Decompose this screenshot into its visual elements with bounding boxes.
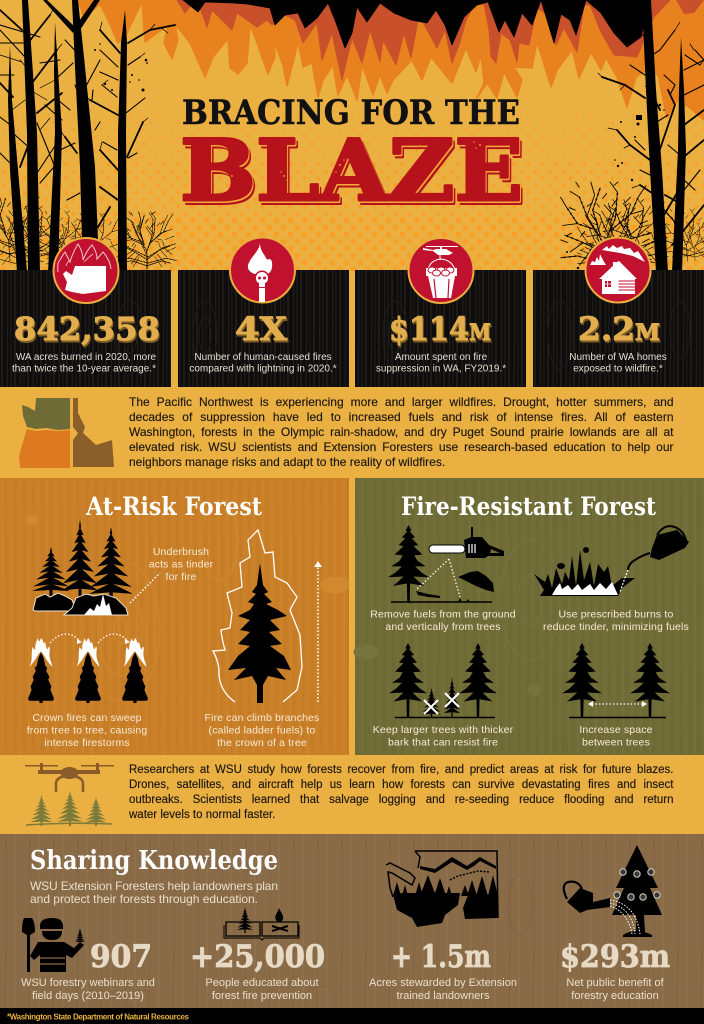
icon: Washington state with forest and river bbox=[386, 851, 498, 927]
label: prescribed burns: reduce tinder, minimizing fuels bbox=[543, 621, 689, 633]
illustration: keep larger trees bbox=[389, 643, 497, 718]
heading: At-Risk Forest bbox=[85, 492, 262, 521]
arrow: underbrush pointer bbox=[130, 573, 160, 603]
label: ladder fuels: (called ladder fuels) to bbox=[209, 724, 315, 736]
text block: research: outbreaks. Scientists learned that salvage logging and re-seeding reduce flooding and return bbox=[129, 794, 674, 806]
label: underbrush: for fire bbox=[166, 571, 196, 583]
label: remove fuels bbox=[370, 608, 516, 633]
caption bbox=[566, 977, 665, 1002]
label: crown fires: from tree to tree, causing bbox=[27, 724, 147, 736]
panel: Fire-Resistant Forest bbox=[354, 478, 704, 755]
arrow: climb upward bbox=[314, 561, 322, 702]
icon: Washington on fire bbox=[54, 238, 118, 303]
label: larger trees: bark that can resist fire bbox=[388, 736, 498, 748]
flames bbox=[78, 0, 704, 120]
dead trees left bbox=[0, 0, 177, 272]
caption: People educated about bbox=[205, 977, 319, 989]
stat panel: homes exposed: 2.2M bbox=[579, 312, 661, 350]
label: prescribed burns bbox=[543, 608, 689, 633]
stat: 907 bbox=[21, 939, 155, 1002]
stat panel: acres burned: WA acres burned in 2020, more bbox=[16, 352, 157, 363]
footer: *Washington State Department of Natural Resources bbox=[7, 1012, 190, 1022]
illustration: increase spacing bbox=[562, 643, 670, 718]
caption bbox=[205, 977, 319, 1002]
illustration: drip torch prescribed burn bbox=[534, 526, 689, 596]
caption: trained landowners bbox=[397, 990, 490, 1002]
label: prescribed burns: Use prescribed burns to bbox=[559, 608, 673, 620]
band: Pacific Northwest intro bbox=[0, 387, 704, 478]
label: spacing: between trees bbox=[582, 736, 650, 748]
stat panel: homes exposed: 2.2M bbox=[578, 310, 660, 348]
footer bbox=[0, 1008, 704, 1024]
caption bbox=[369, 977, 517, 1002]
icon: match with skull bbox=[230, 238, 295, 302]
icon: helicopter and bucket of money bbox=[408, 238, 474, 303]
label: crown fires: intense firestorms bbox=[44, 737, 130, 749]
text block: Pacific Northwest: decades of suppression have led to increased fuels and risk of intense fires. All of eastern bbox=[129, 410, 674, 424]
text block: Pacific Northwest: Washington, forests in the Olympic rain-shadow, and dry Puget Sound prairie lowlands are all at bbox=[129, 425, 674, 439]
text block: Pacific Northwest bbox=[129, 395, 674, 469]
label: larger trees: Keep larger trees with thicker bbox=[373, 724, 514, 736]
illustration: chainsaw removing fuels bbox=[388, 525, 504, 603]
title: Blaze: BLAZE bbox=[180, 121, 523, 220]
illustration: three firs with burning underbrush bbox=[32, 520, 133, 615]
label: crown fires bbox=[27, 712, 147, 749]
label: remove fuels: Remove fuels from the ground bbox=[370, 608, 516, 620]
label: ladder fuels bbox=[205, 712, 319, 749]
stat: 293m: $293m bbox=[560, 939, 670, 975]
stat panel: homes exposed: Number of WA homes bbox=[569, 352, 667, 363]
label: ladder fuels: Fire can climb branches bbox=[205, 712, 319, 724]
stat panel: acres burned: than twice the 10-year average.* bbox=[12, 364, 156, 374]
background: sky bbox=[0, 0, 704, 270]
label: underbrush bbox=[149, 546, 214, 583]
stat panel: suppression spending: $114M bbox=[390, 312, 492, 350]
stat: 293m bbox=[560, 939, 670, 1002]
title: Blaze: BLAZE bbox=[181, 122, 524, 222]
icon: watering can and money tree bbox=[564, 845, 662, 937]
title: Bracing for the: BRACING FOR THE bbox=[182, 93, 520, 133]
stat panel: homes exposed bbox=[533, 270, 704, 387]
label: underbrush: acts as tinder bbox=[149, 558, 214, 570]
stat: 1.5m: + 1.5m bbox=[391, 939, 491, 975]
caption: WSU forestry webinars and bbox=[21, 977, 155, 989]
title: Blaze: BLAZE bbox=[182, 124, 526, 224]
text block: research: Drones, satellites, and aircraft help us learn how forests can survive devastating fires and insect bbox=[129, 779, 674, 791]
stat panel: human-caused fires: 4X bbox=[235, 310, 287, 348]
stat: 25,000: +25,000 bbox=[190, 939, 325, 975]
stat: 25,000 bbox=[190, 939, 325, 1002]
icon: book with tree and campfire bbox=[224, 907, 299, 940]
label: ladder fuels: the crown of a tree bbox=[217, 737, 307, 749]
heading: Fire-Resistant Forest bbox=[401, 492, 656, 521]
stat panel: homes exposed: exposed to wildfire.* bbox=[573, 364, 663, 374]
label: spacing bbox=[579, 724, 653, 748]
stat panel: suppression spending bbox=[355, 270, 526, 387]
panel: At-Risk Forest bbox=[0, 478, 349, 755]
panel: Sharing Knowledge bbox=[0, 834, 704, 1014]
intro text bbox=[30, 879, 278, 906]
label: underbrush: Underbrush bbox=[153, 546, 209, 558]
map: WA, OR, ID bbox=[19, 398, 114, 468]
illustration: ladder fuel tree in flame outline bbox=[213, 530, 302, 703]
stat panel: suppression spending: $114M bbox=[389, 310, 491, 348]
caption: Net public benefit of bbox=[566, 977, 665, 989]
dead trees right bbox=[560, 0, 704, 273]
stat: 1.5m bbox=[369, 939, 517, 1002]
halftone dots bbox=[0, 112, 704, 272]
stat panel: human-caused fires: Number of human-caused fires bbox=[194, 352, 332, 363]
icon: cabin with flames bbox=[586, 238, 650, 302]
stat panel: acres burned bbox=[0, 270, 171, 387]
icon: forestry worker bbox=[22, 918, 85, 972]
text block: Pacific Northwest: neighbors manage risks and adapt to the reality of wildfires. bbox=[129, 455, 445, 469]
intro text: and protect their forests through education. bbox=[30, 892, 258, 906]
stat panel: human-caused fires bbox=[178, 270, 349, 387]
caption: forest fire prevention bbox=[212, 990, 312, 1002]
caption: field days (2010–2019) bbox=[32, 990, 144, 1002]
label: larger trees bbox=[373, 724, 514, 748]
intro text: WSU Extension Foresters help landowners plan bbox=[30, 879, 278, 893]
caption: Acres stewarded by Extension bbox=[369, 977, 517, 989]
stat panel: human-caused fires: 4X bbox=[236, 312, 288, 350]
caption: forestry education bbox=[571, 990, 659, 1002]
label: crown fires: Crown fires can sweep bbox=[32, 712, 142, 724]
stat panel: acres burned: 842,358 bbox=[14, 310, 160, 348]
text block: Pacific Northwest: elevated risk. WSU scientists and Extension Foresters use research-based education to help our bbox=[129, 440, 674, 454]
heading: Sharing Knowledge bbox=[30, 846, 278, 876]
text block: research: Researchers at WSU study how forests recover from fire, and predict areas at risk for future blazes. bbox=[129, 764, 674, 776]
text block: Pacific Northwest: The Pacific Northwest is experiencing more and larger wildfires. Drought, hotter summers, and bbox=[129, 395, 674, 409]
label: spacing: Increase space bbox=[579, 724, 653, 736]
stat panel: suppression spending: suppression in WA, FY2019.* bbox=[376, 364, 506, 374]
band: research bbox=[0, 755, 704, 834]
stat panel: suppression spending: Amount spent on fire bbox=[395, 352, 488, 363]
text block: research: water levels to normal faster. bbox=[129, 809, 275, 821]
text block: research bbox=[128, 764, 674, 821]
stat panel: human-caused fires: compared with lightning in 2020.* bbox=[189, 364, 337, 374]
illustration: crown fire trees bbox=[28, 634, 148, 703]
stat panel: acres burned: 842,358 bbox=[15, 312, 161, 350]
stat: 907: 907 bbox=[90, 939, 152, 975]
icon: drone over trees bbox=[25, 763, 114, 826]
caption bbox=[21, 977, 155, 1002]
label: remove fuels: and vertically from trees bbox=[385, 621, 501, 633]
